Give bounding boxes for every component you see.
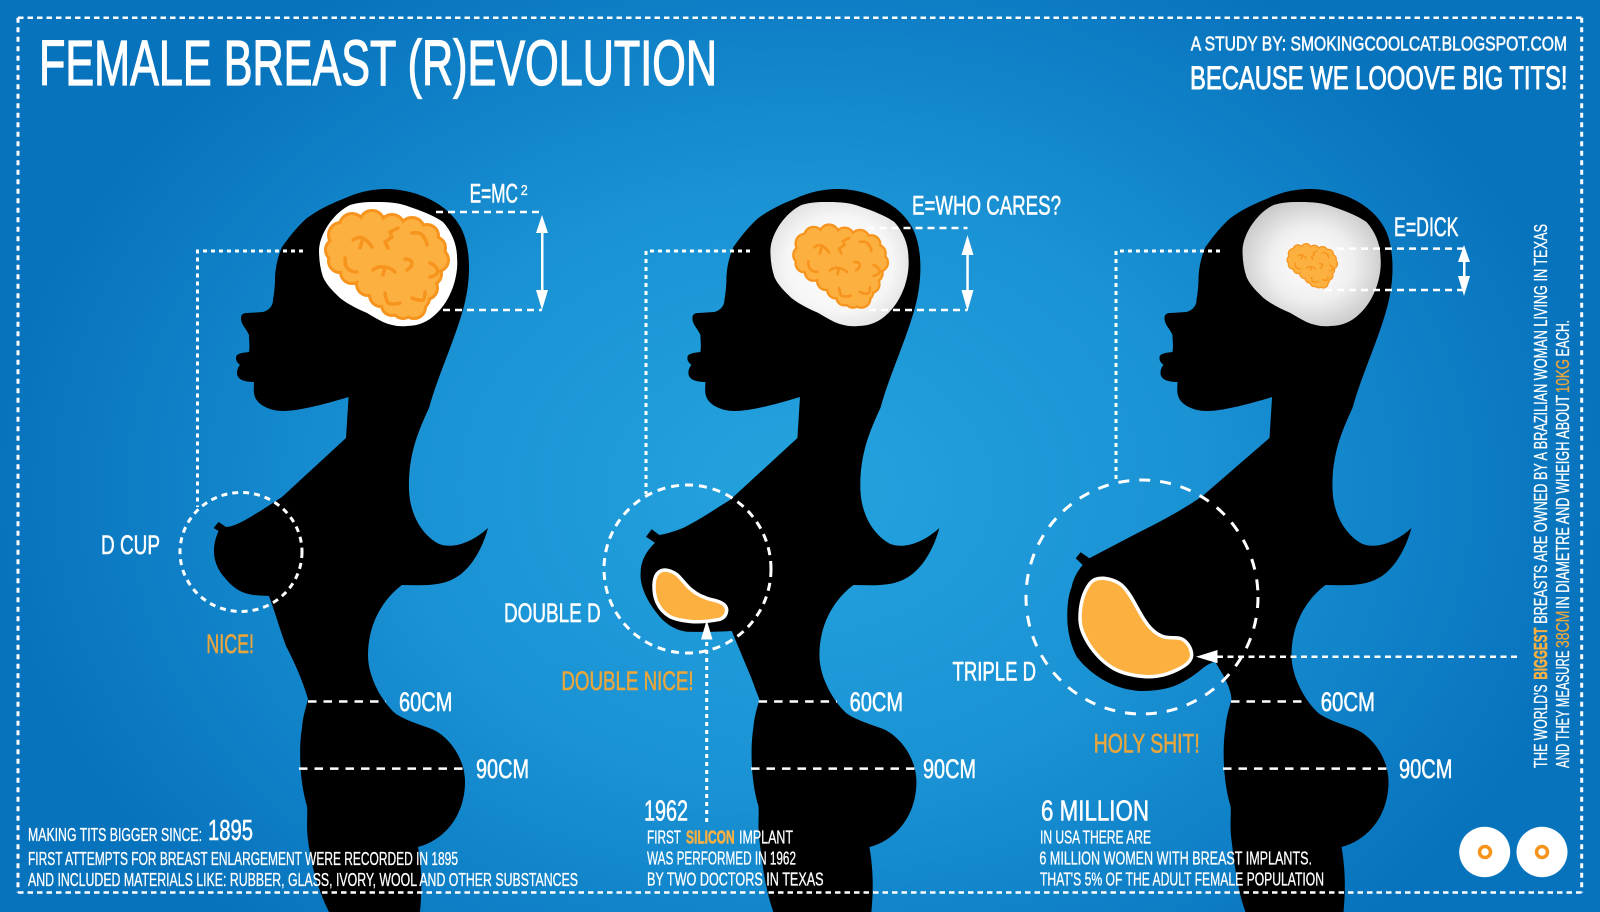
label: nice: NICE!	[206, 629, 254, 659]
brain height markers	[1325, 249, 1464, 290]
text block: 6 million	[1039, 796, 1324, 890]
circle: breast size	[1026, 480, 1258, 714]
waist line	[308, 700, 386, 703]
text block: since 1895: FIRST ATTEMPTS FOR BREAST ENLARGEMENT WERE RECORDED IN 1895	[28, 849, 458, 869]
hip line	[1223, 767, 1388, 770]
text block: since 1895: 1895	[208, 815, 253, 847]
text block: 6 million: THAT'S 5% OF THE ADULT FEMALE POPULATION	[1040, 870, 1324, 890]
brain: small	[1288, 244, 1337, 287]
text block: since 1895	[28, 815, 578, 890]
circle: breast size	[180, 492, 302, 612]
brain height markers	[868, 228, 968, 310]
bracket: brain to breast	[198, 251, 303, 507]
label: E=dick: E=DICK	[1394, 212, 1458, 242]
label: holy shit: HOLY SHIT!	[1094, 728, 1200, 758]
rotated note: world's biggest: 38CM	[1553, 611, 1573, 648]
label: 90cm: 90CM	[476, 754, 529, 784]
label: triple D: TRIPLE D	[952, 657, 1036, 687]
figure 3: silhouette with large implant	[1067, 189, 1412, 912]
figure 1: silhouette with brain	[214, 189, 488, 912]
label: 90cm: 90CM	[923, 754, 976, 784]
figure 2: silhouette with implant	[641, 189, 939, 912]
arrow: to implant	[701, 620, 712, 823]
head cavity	[319, 202, 457, 326]
text block: 1962: SILICON	[686, 827, 735, 847]
rotated note: world's biggest: THE WORLD'S	[1531, 684, 1551, 768]
icon: logo circles	[1459, 827, 1568, 877]
text block: 1962: 1962	[644, 796, 688, 828]
arrow: brain height	[962, 235, 974, 311]
rotated note: world's biggest: EACH.	[1553, 320, 1573, 356]
figure 3 annotations	[952, 212, 1518, 784]
silhouette: triple D woman	[1067, 189, 1412, 912]
rotated note: world's biggest	[1531, 224, 1573, 768]
head cavity	[1242, 202, 1381, 326]
waist line	[759, 700, 837, 703]
figure 1 annotations	[101, 178, 548, 784]
arrow: brain height	[1458, 245, 1470, 296]
text block: 1962: IMPLANT	[739, 827, 793, 847]
arrow: brain height	[536, 215, 548, 310]
brain height markers	[436, 212, 542, 310]
label: E=MC2: E=MC	[470, 178, 518, 208]
rotated note: world's biggest: BREASTS ARE OWNED BY A BRAZILIAN WOMAN LIVING IN TEXAS	[1531, 224, 1551, 624]
rotated note: world's biggest: 10KG	[1553, 359, 1573, 393]
label: D cup: D CUP	[101, 530, 160, 560]
text block: 1962	[644, 796, 824, 890]
brain: medium	[794, 226, 887, 307]
implant	[1080, 578, 1192, 677]
title: FEMALE BREAST (R)EVOLUTION	[39, 27, 717, 99]
label: double nice: DOUBLE NICE!	[561, 666, 694, 696]
text block: 1962: WAS PERFORMED IN 1962	[647, 848, 796, 868]
silhouette: D cup woman	[214, 189, 488, 912]
rotated note: world's biggest: IN DIAMETRE AND WHEIGH ABOUT	[1553, 395, 1573, 609]
label: superscript: 2	[521, 182, 528, 199]
text block: 6 million: IN USA THERE ARE	[1040, 827, 1151, 847]
text block: since 1895: MAKING TITS BIGGER SINCE:	[28, 825, 202, 845]
rotated note: world's biggest: AND THEY MEASURE	[1553, 650, 1573, 768]
hip line	[299, 767, 465, 770]
circle: breast size	[604, 485, 771, 653]
label: E=who cares: E=WHO CARES?	[912, 191, 1061, 221]
text block: 1962: BY TWO DOCTORS IN TEXAS	[647, 870, 824, 890]
label: 60cm: 60CM	[850, 687, 903, 717]
text block: 1962: FIRST	[647, 827, 681, 847]
hip line	[751, 767, 918, 770]
rotated note: world's biggest: BIGGEST	[1531, 628, 1551, 680]
label: double D: DOUBLE D	[504, 598, 601, 628]
label: 60cm: 60CM	[1321, 687, 1375, 717]
brain: large	[327, 212, 447, 317]
bracket: brain to breast	[1116, 251, 1220, 480]
silhouette: double D woman	[641, 189, 939, 912]
text block: since 1895: AND INCLUDED MATERIALS LIKE: RUBBER, GLASS, IVORY, WOOL AND OTHER SUBSTANCES	[28, 870, 578, 890]
arrow: to implant	[1196, 650, 1518, 663]
text block: 6 million: 6 MILLION WOMEN WITH BREAST IMPLANTS.	[1039, 848, 1312, 868]
waist line	[1231, 700, 1308, 703]
head cavity	[770, 202, 909, 326]
text block: 6 million: 6 MILLION	[1041, 796, 1149, 828]
implant	[654, 570, 727, 622]
figure 2 annotations	[504, 191, 1061, 823]
label: 60cm: 60CM	[399, 687, 452, 717]
label: 90cm: 90CM	[1399, 754, 1452, 784]
bracket: brain to breast	[646, 251, 750, 494]
